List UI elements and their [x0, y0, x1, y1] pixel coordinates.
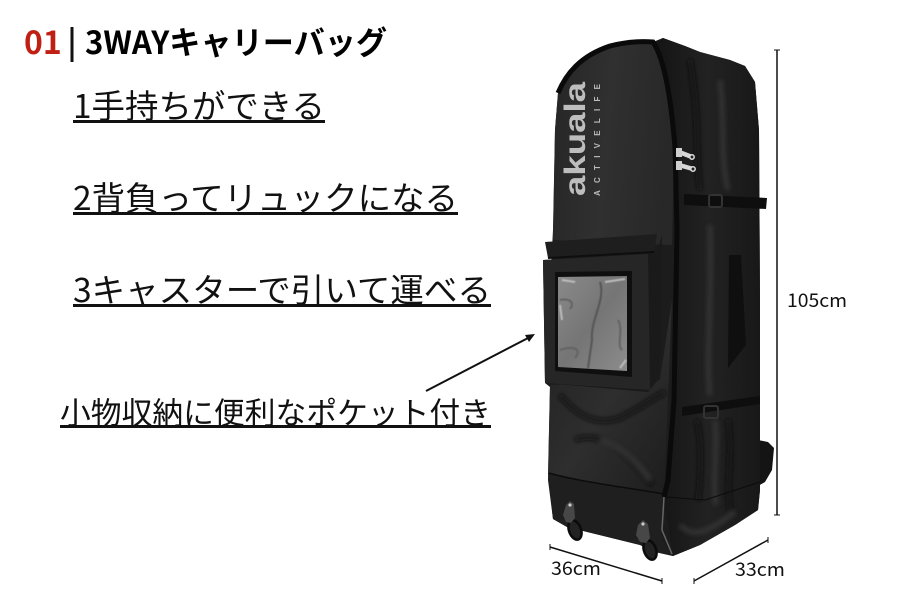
bag bottom flap	[548, 473, 673, 556]
pocket window	[555, 271, 632, 377]
dimension: depth 33cm	[694, 537, 785, 584]
zipper pulls	[676, 148, 695, 171]
dimension: depth 33cm: 33cm	[735, 556, 785, 582]
bag photo illustration	[543, 38, 774, 561]
logo	[559, 82, 602, 196]
lower strap with buckle	[682, 396, 760, 418]
feature 1 text: 1手持ちができる	[73, 80, 325, 128]
bag front lower panel	[548, 300, 672, 497]
bag silhouette	[545, 38, 760, 556]
right wheel	[636, 520, 659, 561]
logo: ACTIVELIFE	[593, 83, 602, 196]
bag fold shading	[560, 60, 735, 532]
dimension: width 36cm	[550, 544, 662, 584]
title: 01	[24, 18, 62, 64]
bag front upper panel	[553, 42, 674, 245]
arrow: callout to pocket	[426, 334, 535, 391]
dimension: width 36cm: 36cm	[551, 555, 601, 581]
pocket	[543, 234, 662, 392]
feature 3 text: 3キャスターで引いて運べる	[73, 264, 491, 312]
bag side panel	[655, 38, 760, 556]
pocket callout text: 小物収納に便利なポケット付き	[60, 389, 491, 433]
logo: akuala	[559, 82, 592, 196]
dimension: height 105cm: 105cm	[787, 287, 847, 313]
upper strap with buckle	[684, 194, 767, 209]
left wheel	[563, 501, 584, 541]
back pad bulge	[758, 440, 774, 486]
title: 3WAYキャリーバッグ	[85, 18, 387, 64]
side handle	[728, 255, 746, 368]
feature 2 text: 2背負ってリュックになる	[73, 172, 458, 220]
main zipper	[558, 42, 677, 497]
